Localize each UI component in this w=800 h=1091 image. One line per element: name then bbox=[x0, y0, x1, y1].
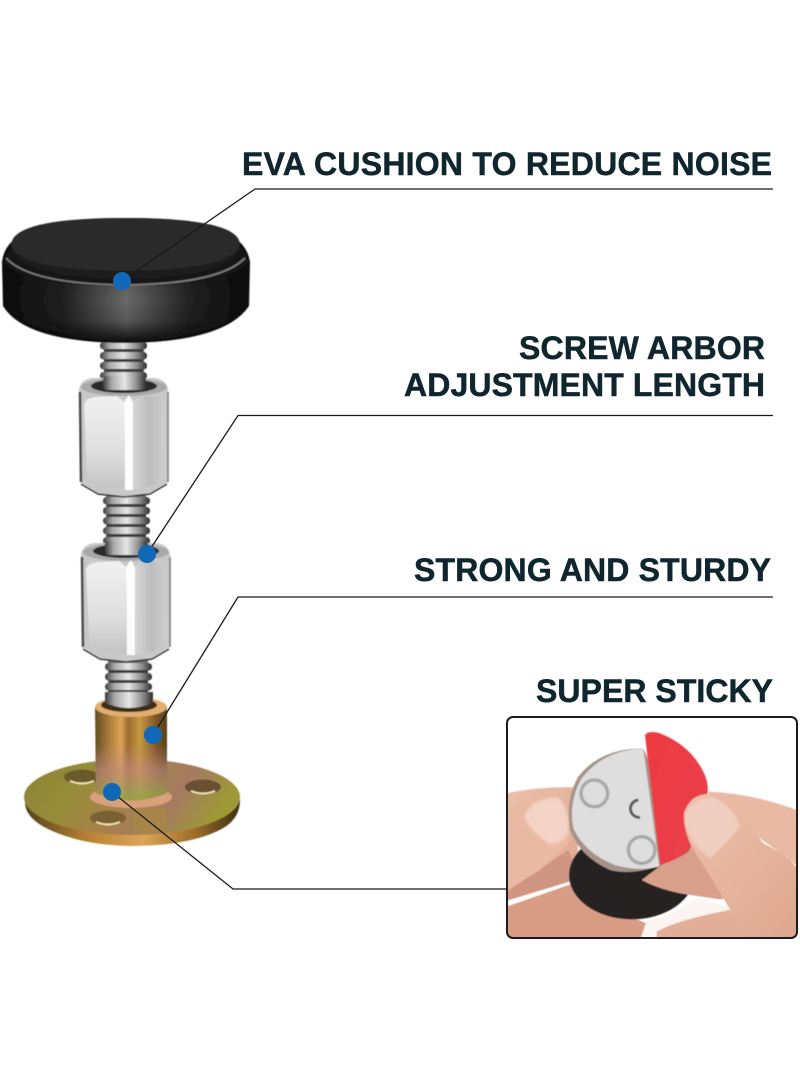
callout leader lines bbox=[112, 189, 773, 889]
lower left fingers bbox=[507, 882, 647, 940]
right thumb bbox=[684, 794, 798, 940]
label: screw arbor adjustment length: ADJUSTMENT LENGTH bbox=[404, 367, 765, 403]
screw section middle bbox=[103, 494, 150, 547]
photo panel: peeling adhesive backing bbox=[507, 717, 798, 940]
grey adhesive surface bbox=[572, 748, 659, 869]
black EVA cushion cap bbox=[2, 218, 250, 343]
left thumbnail bbox=[524, 797, 569, 844]
hex nut lower bbox=[81, 541, 170, 662]
product illustration: adjustable stopper bbox=[2, 218, 250, 846]
label: screw arbor adjustment length: SCREW ARBOR bbox=[519, 330, 765, 366]
right thumbnail bbox=[685, 797, 740, 858]
left thumb bbox=[531, 836, 568, 875]
metal disc rim bbox=[569, 748, 690, 872]
shadow under finger bbox=[508, 850, 573, 901]
white gap lower right bbox=[640, 898, 730, 937]
marker dot: cushion bbox=[113, 272, 131, 290]
marker dot: sleeve bbox=[144, 726, 162, 744]
label: super sticky: SUPER STICKY bbox=[536, 673, 773, 709]
marker dot: screw bbox=[138, 545, 156, 563]
left hand upper finger bbox=[508, 786, 579, 892]
right finger behind bbox=[707, 792, 798, 867]
photo frame bbox=[507, 717, 797, 938]
adhesive ring marks bbox=[581, 780, 655, 863]
title: EVA cushion label: EVA CUSHION TO REDUCE NOISE bbox=[242, 146, 772, 182]
screw section upper bbox=[100, 340, 147, 384]
bottom finger bbox=[656, 910, 748, 937]
label: screw arbor adjustment length bbox=[404, 330, 765, 403]
palm behind disc bbox=[641, 846, 724, 900]
black foam pad bbox=[569, 831, 694, 919]
brass sleeve bbox=[95, 692, 167, 800]
marker dot: base bbox=[103, 783, 121, 801]
brass base plate bbox=[24, 759, 240, 846]
hex nut upper bbox=[79, 376, 168, 497]
red backing film bbox=[645, 732, 708, 865]
label: strong and sturdy: STRONG AND STURDY bbox=[414, 552, 771, 588]
screw section lower bbox=[105, 660, 152, 706]
